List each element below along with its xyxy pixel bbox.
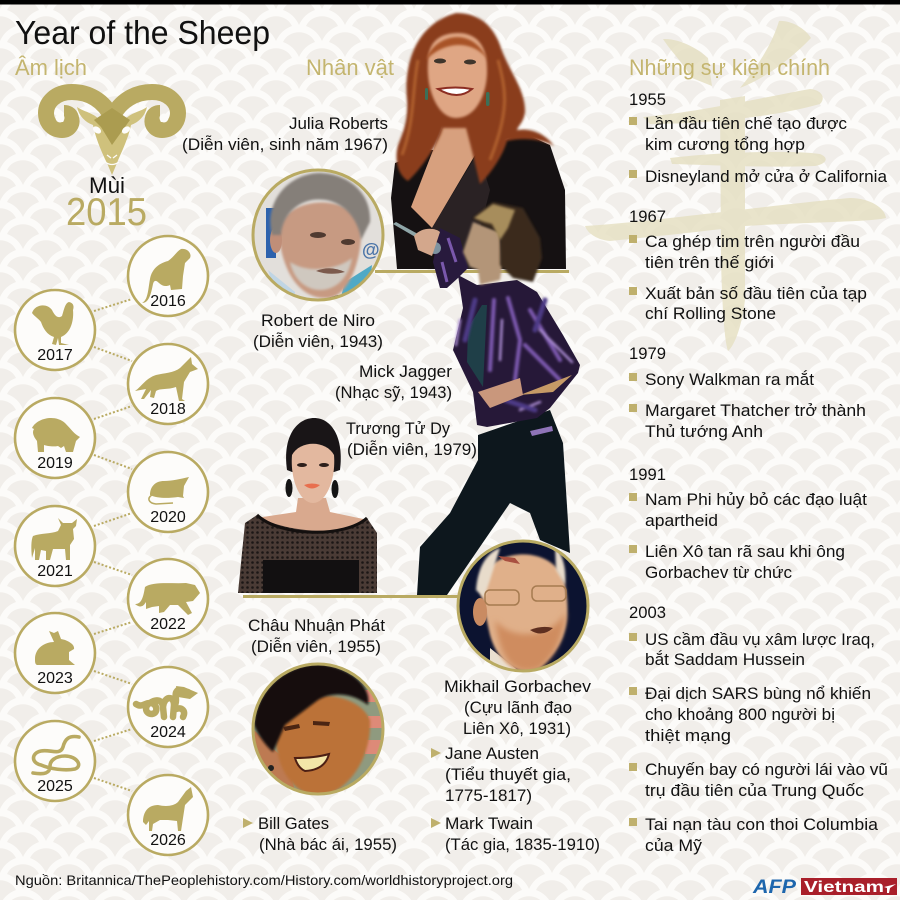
caption: Jane Austen: 1775-1817) (445, 786, 532, 805)
events: 2003: US cầm đầu vụ xâm lược Iraq, (645, 630, 875, 649)
events: 1991: 1991 (629, 465, 666, 484)
events: 2003 (629, 603, 888, 855)
caption: Mikhail Gorbachev: (Cựu lãnh đạo (464, 698, 572, 717)
caption: Jane Austen: Jane Austen (445, 744, 539, 763)
photo: Robert de Niro: @ (362, 240, 380, 260)
caption: Mick Jagger: Mick Jagger (359, 362, 452, 381)
caption: Bill Gates: (Nhà bác ái, 1955) (259, 835, 397, 854)
zodiac: rat 2020 (128, 452, 208, 532)
photo: Mikhail Gorbachev (458, 541, 588, 680)
heading: main events: Những sự kiện chính (629, 55, 830, 80)
events: 1979 (629, 344, 866, 441)
events: 2003: của Mỹ (645, 836, 703, 855)
caption: Robert de Niro (253, 311, 383, 351)
caption: Jane Austen (431, 744, 571, 805)
caption: Mick Jagger (335, 362, 452, 402)
label: 2015: 2015 (66, 191, 147, 234)
photo: Chow Yun-fat (253, 664, 388, 796)
zodiac connectors (94, 299, 132, 791)
events: 1991: Gorbachev từ chức (645, 563, 792, 582)
divider: upper gold rule (375, 270, 569, 273)
zodiac: dog 2018 (128, 344, 208, 424)
icon: ram head (46, 92, 178, 175)
photo: Julia Roberts (391, 13, 566, 269)
events: 2003: bắt Saddam Hussein (645, 650, 805, 669)
zodiac: tiger 2022 (128, 559, 208, 639)
events: 1967: Ca ghép tim trên người đầu (645, 232, 860, 251)
events: 2003: cho khoảng 800 người bị (645, 705, 835, 724)
heading: characters: Nhân vật (306, 55, 394, 80)
zodiac: snake 2025 (15, 721, 95, 801)
photo: Zhang Ziyi (238, 418, 377, 593)
caption: Mikhail Gorbachev (444, 677, 592, 738)
icon: chinese character for sheep watermark (585, 21, 886, 351)
events: 1991 (629, 465, 867, 582)
events: 1967: Xuất bản số đầu tiên của tạp (645, 284, 867, 303)
zodiac: monkey 2016: 2016 (150, 293, 186, 310)
caption: Robert de Niro: Robert de Niro (261, 311, 375, 330)
events: 2003: Tai nạn tàu con thoi Columbia (645, 815, 879, 834)
events: 2003: thiệt mạng (645, 726, 731, 745)
events: 1991: Nam Phi hủy bỏ các đạo luật (645, 490, 867, 509)
zodiac: rat 2020: 2020 (150, 509, 186, 526)
zodiac: rabbit 2023: 2023 (37, 670, 73, 687)
events: 1967: 1967 (629, 207, 666, 226)
logo: AFP Vietnam+: Vietnam (804, 879, 884, 896)
events: 2003: 2003 (629, 603, 666, 622)
events: 1967: tiên trên thế giới (645, 253, 774, 272)
caption: Mark Twain: Mark Twain (445, 814, 533, 833)
zodiac: ox 2021 (15, 506, 95, 586)
events: 1979: Sony Walkman ra mắt (645, 370, 814, 389)
caption: Mark Twain: (Tác gia, 1835-1910) (445, 835, 600, 854)
title: Year of the Sheep (15, 14, 270, 51)
zodiac: tiger 2022: 2022 (150, 616, 186, 633)
caption: Bill Gates (243, 814, 397, 854)
zodiac: pig 2019 (15, 398, 95, 478)
caption: Julia Roberts: Julia Roberts (289, 114, 388, 133)
events: 1979: Margaret Thatcher trở thành (645, 401, 866, 420)
events: 2003: Đại dịch SARS bùng nổ khiến (645, 684, 871, 703)
events: 1991: Liên Xô tan rã sau khi ông (645, 542, 845, 561)
caption: Mikhail Gorbachev: Mikhail Gorbachev (444, 677, 592, 696)
zodiac: pig 2019: 2019 (37, 455, 73, 472)
caption: Mark Twain (431, 814, 600, 854)
caption: Julia Roberts (182, 114, 388, 154)
heading: lunar calendar: Âm lịch (15, 55, 87, 80)
events: 1967: chí Rolling Stone (645, 304, 776, 323)
zodiac: dragon 2024 (128, 667, 208, 747)
caption: Chow Yun-fat (248, 616, 385, 656)
caption: Jane Austen: (Tiểu thuyết gia, (445, 765, 571, 784)
logo: AFP Vietnam+: AFP (752, 877, 796, 898)
zodiac: rooster 2017: 2017 (37, 347, 73, 364)
zodiac: horse 2026 (128, 775, 208, 855)
label: Mùi: Mùi (89, 173, 125, 198)
events: 1955: Lần đầu tiên chế tạo được (645, 114, 848, 133)
events: 1955: Disneyland mở cửa ở California (645, 167, 888, 186)
caption: Robert de Niro: (Diễn viên, 1943) (253, 332, 383, 351)
zodiac: horse 2026: 2026 (150, 832, 186, 849)
zodiac: dog 2018: 2018 (150, 401, 186, 418)
events: 1955 (629, 90, 888, 186)
events: 2003: Chuyến bay có người lái vào vũ (645, 760, 888, 779)
events: 2003: trụ đầu tiên của Trung Quốc (645, 781, 865, 800)
zodiac: snake 2025: 2025 (37, 778, 73, 795)
caption: Zhang Ziyi (346, 419, 477, 459)
caption: Zhang Ziyi: (Diễn viên, 1979) (347, 440, 477, 459)
zodiac: dragon 2024: 2024 (150, 724, 186, 741)
zodiac: monkey 2016 (128, 236, 208, 316)
caption: Mikhail Gorbachev: Liên Xô, 1931) (463, 719, 571, 738)
events: 1967 (629, 207, 867, 323)
caption: Julia Roberts: (Diễn viên, sinh năm 1967) (182, 135, 388, 154)
caption: Bill Gates: Bill Gates (258, 814, 329, 833)
zodiac: rabbit 2023 (15, 613, 95, 693)
zodiac: ox 2021: 2021 (37, 563, 73, 580)
events: 1991: apartheid (645, 511, 718, 530)
events: 1979: Thủ tướng Anh (645, 422, 763, 441)
caption: Chow Yun-fat: Châu Nhuận Phát (248, 616, 385, 635)
caption: Mick Jagger: (Nhạc sỹ, 1943) (335, 383, 452, 402)
photo: Mick Jagger (393, 202, 580, 595)
events: 1955: kim cương tổng hợp (645, 135, 805, 154)
source line: Nguồn: Britannica/ThePeoplehistory.com/History.com/worldhistoryproject.org (15, 872, 513, 888)
caption: Zhang Ziyi: Trương Tử Dy (346, 419, 450, 438)
divider: lower gold rule (243, 595, 468, 598)
events: 1955: 1955 (629, 90, 666, 109)
logo: AFP Vietnam+ (752, 877, 897, 898)
zodiac: rooster 2017 (15, 290, 95, 370)
caption: Chow Yun-fat: (Diễn viên, 1955) (251, 637, 381, 656)
events: 1979: 1979 (629, 344, 666, 363)
photo: Robert de Niro (253, 170, 383, 300)
